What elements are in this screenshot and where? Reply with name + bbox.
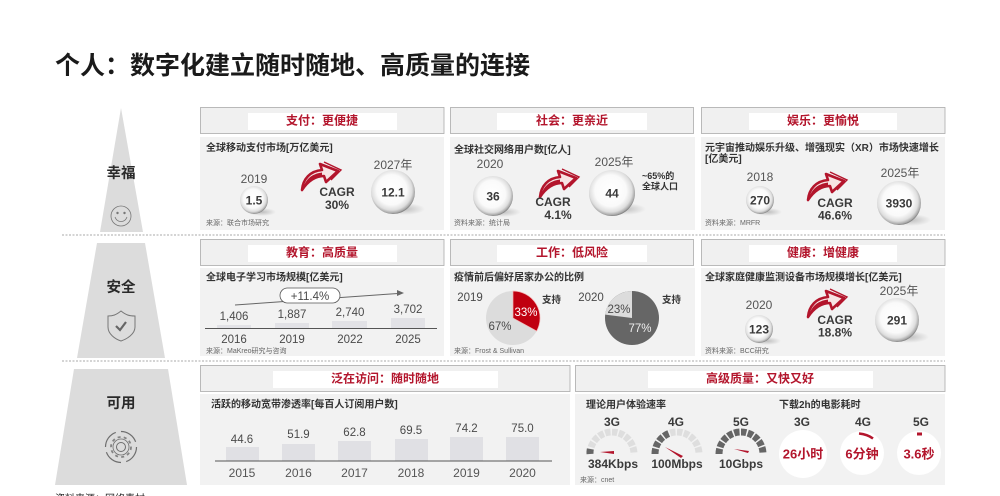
bar chart: mobile broadband: 2016 xyxy=(285,466,312,480)
gauge: 3G xyxy=(588,415,638,471)
bar chart: mobile broadband: 2017 xyxy=(341,466,368,480)
gauge: 5G: 10Gbps xyxy=(719,457,763,471)
panel: 健康 xyxy=(701,240,945,356)
arrow xyxy=(808,172,847,200)
growth arrow with +11.4% pill: +11.4% xyxy=(291,291,329,303)
CAGR label: 18.8% xyxy=(818,326,852,340)
bubble: 36 xyxy=(473,176,521,217)
bar chart: mobile broadband xyxy=(215,423,552,480)
panel: 泛在访问 xyxy=(200,366,570,485)
CAGR label: 46.6% xyxy=(818,208,852,222)
panel: 娱乐: 2018 xyxy=(747,170,774,184)
pyramid tier: 安全: 安全 xyxy=(106,278,136,296)
dial: 5G download time: 3.6秒 xyxy=(903,446,935,462)
panel: 高级质量: 来源：cnet xyxy=(580,475,614,484)
panel: 高级质量 xyxy=(575,366,945,485)
pie chart: 2019: 33% xyxy=(514,307,538,319)
panel: 支付: 来源：联合市场研究 xyxy=(206,218,269,227)
panel: 健康: 全球家庭健康监测设备市场规模增长[亿美元] xyxy=(705,270,902,284)
bar chart: mobile broadband: 69.5 xyxy=(400,425,422,437)
gauge: 4G: 100Mbps xyxy=(651,457,703,471)
panel: 支付: 2019 xyxy=(241,172,268,186)
header: 社会: 社会：更亲近 xyxy=(536,112,608,128)
title: 个人：数字化建立随时随地、高质量的连接 xyxy=(55,52,530,80)
header: 教育: 教育：高质量 xyxy=(286,244,358,260)
dial: 5G download time xyxy=(897,415,941,475)
CAGR label: CAGR xyxy=(319,185,355,199)
bar chart: e-learning: 1,406 xyxy=(220,311,248,323)
gauge: 5G xyxy=(719,415,763,471)
pie chart: 2019 xyxy=(486,291,540,345)
gauge: 3G: 384Kbps xyxy=(588,457,638,471)
bar chart: mobile broadband: 44.6 xyxy=(231,434,253,446)
bar chart: mobile broadband: 2015 xyxy=(229,466,256,480)
header: 泛在访问: 泛在访问：随时随地 xyxy=(331,370,439,386)
panel: 教育: 来源：MaKreo研究与咨询 xyxy=(206,346,287,355)
header: 社会 xyxy=(450,108,694,134)
bubble: 3930: 3930 xyxy=(886,196,913,210)
bubble: 3930 xyxy=(877,181,931,226)
panel: 娱乐: 资料来源：MRFR xyxy=(705,218,760,227)
bar chart: mobile broadband: 2020 xyxy=(509,466,536,480)
bubble: 1.5 xyxy=(240,186,276,216)
bar chart: mobile broadband: 74.2 xyxy=(455,423,478,435)
icon: smiley xyxy=(111,206,131,226)
panel: 工作: 疫情前后偏好居家办公的比例 xyxy=(454,270,584,284)
pyramid tier: 幸福 xyxy=(100,108,143,232)
panel: 社会: 2020 xyxy=(477,157,504,171)
bar chart: e-learning: 2,740 xyxy=(336,307,364,319)
header: 工作 xyxy=(450,240,694,266)
dial: 3G download time: 3G xyxy=(794,415,810,429)
panel: 娱乐: [亿美元] xyxy=(705,152,742,165)
label: 支持 2019: 支持 xyxy=(542,294,562,306)
bubble: 12.1 xyxy=(371,170,425,215)
note: 65% of world population: ~65%的 xyxy=(642,171,674,181)
panel: 高级质量: 下载2h的电影耗时 xyxy=(779,398,861,411)
bubble: 1.5: 1.5 xyxy=(246,194,263,208)
header: 支付: 支付：更便捷 xyxy=(286,112,358,128)
panel: 娱乐 xyxy=(701,108,945,230)
panel: 工作 xyxy=(450,240,695,356)
dial: 5G download time: 5G xyxy=(913,415,929,429)
pie chart: 2019: 67% xyxy=(488,321,512,333)
panel: 泛在访问: 活跃的移动宽带渗透率[每百人订阅用户数] xyxy=(211,398,398,410)
bubble: 12.1: 12.1 xyxy=(381,186,405,200)
panel: 支付: 全球移动支付市场[万亿美元] xyxy=(206,141,333,154)
header: 工作: 工作：低风险 xyxy=(536,244,608,260)
panel: 教育: 全球电子学习市场规模[亿美元] xyxy=(206,270,343,284)
dial: 4G download time xyxy=(840,415,884,475)
bar chart: e-learning: 1,887 xyxy=(278,309,306,321)
header: 支付 xyxy=(200,108,444,134)
panel: 社会 xyxy=(450,108,695,230)
bar chart: mobile broadband: 2019 xyxy=(453,466,480,480)
header: 教育 xyxy=(200,240,444,266)
bar chart: mobile broadband: 2018 xyxy=(398,466,425,480)
arrow xyxy=(302,162,341,190)
CAGR label: CAGR xyxy=(535,195,571,209)
bubble: 291: 291 xyxy=(887,314,907,328)
CAGR label: CAGR xyxy=(817,196,853,210)
pyramid tier: 幸福: 幸福 xyxy=(106,165,136,182)
bubble: 270 xyxy=(746,186,782,216)
icon: gear cycle xyxy=(106,432,136,462)
panel: 社会: 2025年 xyxy=(595,155,633,169)
bar chart: e-learning xyxy=(205,304,437,346)
pie chart: 2020 xyxy=(605,291,659,345)
header: 泛在访问 xyxy=(200,366,570,392)
gauge: 4G xyxy=(651,415,703,471)
icon: shield xyxy=(108,311,135,341)
header: 健康 xyxy=(702,240,945,266)
pie chart: 2020: 23% xyxy=(607,304,631,316)
bubble: 123: 123 xyxy=(749,322,769,336)
pyramid tier: 安全 xyxy=(77,243,165,358)
CAGR label: 30% xyxy=(325,198,349,212)
header: 娱乐: 娱乐：更愉悦 xyxy=(787,112,859,128)
bubble: 123 xyxy=(745,315,781,345)
panel: 支付: 2027年 xyxy=(374,158,412,172)
note: 65% of world population: 全球人口 xyxy=(642,180,678,192)
panel: 高级质量: 理论用户体验速率 xyxy=(586,398,666,411)
growth arrow with +11.4% pill xyxy=(235,288,404,305)
dial: 3G download time xyxy=(779,415,827,478)
bubble: 291 xyxy=(875,298,929,343)
panel: 工作: 2019 xyxy=(457,292,483,304)
bar chart: mobile broadband: 51.9 xyxy=(287,429,310,441)
bar chart: mobile broadband: 75.0 xyxy=(511,423,534,435)
bubble: 44 xyxy=(589,170,646,216)
pie chart: 2020: 77% xyxy=(628,323,652,335)
header: 娱乐 xyxy=(702,108,945,134)
bar chart: e-learning: 2022 xyxy=(337,334,363,346)
bubble: 44: 44 xyxy=(605,186,619,200)
panel: 社会: 资料来源：统计局 xyxy=(454,218,510,227)
panel: 娱乐: 元宇宙推动娱乐升级、增强现实（XR）市场快速增长 xyxy=(705,143,939,154)
bar chart: e-learning: 2025 xyxy=(395,334,421,346)
header: 高级质量: 高级质量：又快又好 xyxy=(706,370,814,386)
panel: 工作: 来源：Frost & Sullivan xyxy=(454,346,524,355)
CAGR label: CAGR xyxy=(817,313,853,327)
panel: 健康: 资料来源：BCC研究 xyxy=(705,346,769,355)
pyramid tier: 可用 xyxy=(55,369,187,485)
panel: 工作: 2020 xyxy=(578,292,604,304)
dial: 3G download time: 26小时 xyxy=(783,446,823,462)
gauge: 3G: 3G xyxy=(604,415,620,429)
panel: 娱乐: 2025年 xyxy=(881,166,919,180)
gauge: 5G: 5G xyxy=(733,415,749,429)
bar chart: e-learning: 2019 xyxy=(279,334,305,346)
arrow xyxy=(540,169,579,197)
panel: 健康: 2025年 xyxy=(880,284,918,298)
arrow xyxy=(808,289,847,317)
bar chart: mobile broadband: 62.8 xyxy=(343,427,366,439)
header: 高级质量 xyxy=(576,366,945,392)
panel: 教育 xyxy=(200,240,444,356)
CAGR label: 4.1% xyxy=(544,208,572,222)
header: 健康: 健康：增健康 xyxy=(787,244,859,260)
bubble: 270: 270 xyxy=(750,194,770,208)
dial: 4G download time: 6分钟 xyxy=(845,446,879,462)
dial: 4G download time: 4G xyxy=(855,415,871,429)
bubble: 36: 36 xyxy=(486,190,500,204)
label: 支持 2020: 支持 xyxy=(662,294,682,306)
panel: 支付 xyxy=(200,108,444,230)
pyramid tier: 可用: 可用 xyxy=(106,396,136,412)
bar chart: e-learning: 2016 xyxy=(221,334,247,346)
bar chart: e-learning: 3,702 xyxy=(394,304,422,316)
panel: 社会: 全球社交网络用户数[亿人] xyxy=(454,143,571,156)
panel: 健康: 2020 xyxy=(746,298,773,312)
gauge: 4G: 4G xyxy=(668,415,684,429)
